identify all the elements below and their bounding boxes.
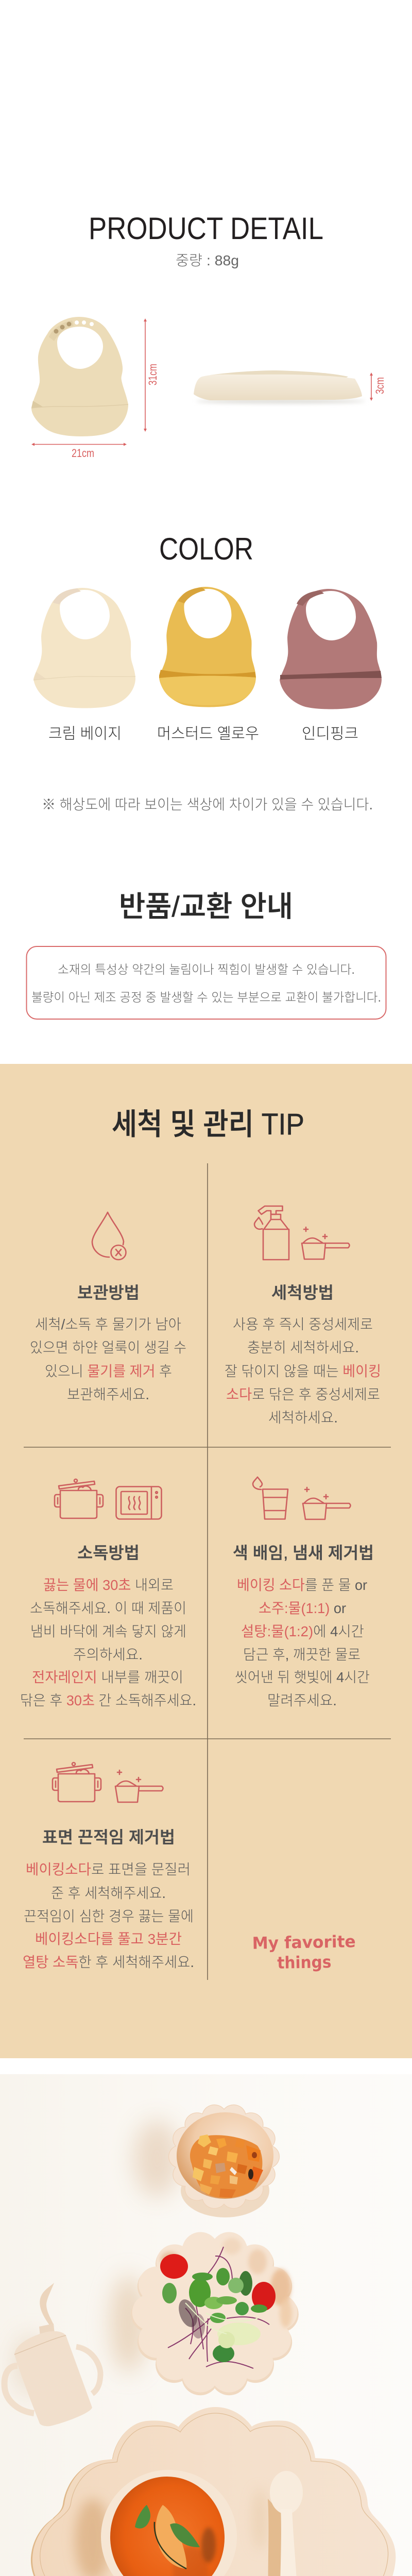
cell: sterilizing method [20, 1479, 196, 1708]
cell: storage method [30, 1212, 186, 1402]
cell: stain and odor removal [233, 1477, 374, 1708]
body text: 충분히 세척하세요. [247, 1340, 359, 1355]
icon: cup and detergent scoop [253, 1477, 350, 1519]
icon: pot and detergent scoop [53, 1762, 163, 1802]
height label: 31cm [146, 364, 159, 385]
cell: washing method [225, 1206, 381, 1426]
body text: 전자레인지 내부를 깨끗이 [32, 1669, 183, 1685]
sippy cup [5, 2283, 100, 2426]
panel: washing and care tips [0, 1064, 412, 2058]
product photo: folded bib side view with thickness [194, 370, 386, 403]
body text: 소다로 닦은 후 중성세제로 [226, 1386, 380, 1402]
icon: water drop with cross [92, 1212, 126, 1260]
body text: 끓는 물에 30초 내외로 [43, 1577, 174, 1593]
notice line 1: 소재의 특성상 약간의 눌림이나 찍힘이 발생할 수 있습니다. [58, 963, 355, 977]
body text [20, 1577, 196, 1708]
pumpkin slice [156, 2505, 186, 2569]
body text: 닦은 후 30초 간 소독해주세요. [20, 1692, 196, 1708]
basil leaves [170, 2523, 200, 2547]
title: product detail: PRODUCT DETAIL [89, 211, 323, 246]
arrow: width [31, 443, 127, 446]
product photo: bib with width and height dimensions [31, 317, 159, 460]
body text: 말려주세요. [267, 1692, 337, 1708]
body text: 주의하세요. [73, 1647, 143, 1663]
body text: 있으니 물기를 제거 후 [45, 1363, 172, 1379]
color swatch: cream beige bib [33, 588, 135, 742]
top scalloped bowl with cereal [134, 2105, 279, 2217]
body text [235, 1577, 370, 1708]
body text: 준 후 세척해주세요. [51, 1885, 166, 1901]
tomato right [252, 2282, 276, 2311]
body text: 베이킹소다로 표면을 문질러 [26, 1861, 191, 1877]
body text: 보관해주세요. [67, 1386, 149, 1402]
shadow [196, 399, 366, 403]
brand mark: my favorite things [252, 1931, 356, 1973]
arrow: thickness [370, 372, 373, 401]
body text: 잘 닦이지 않을 때는 베이킹 [225, 1363, 381, 1379]
heading: returns and exchange: 반품/교환 안내 [119, 890, 293, 923]
heading: care tip: 세척 및 관리 TIP [112, 1108, 304, 1141]
body text: 담근 후, 깨끗한 물로 [243, 1647, 360, 1663]
scalloped placemat [29, 2407, 399, 2576]
callout: returns notice box [27, 946, 386, 1019]
heading: 표면 끈적임 제거법 [42, 1828, 175, 1846]
body text: 씻어낸 뒤 햇빛에 4시간 [235, 1669, 370, 1685]
body text: 사용 후 즉시 중성세제로 [233, 1316, 373, 1332]
folded bib [210, 370, 348, 381]
icon: pot and microwave [55, 1479, 162, 1519]
heading: 색 배임, 냄새 제거법 [233, 1544, 374, 1562]
note: color disclaimer: ※ 해상도에 따라 보이는 색상에 차이가 있을 수 있습니다. [42, 796, 373, 812]
body text: 냄비 바닥에 계속 닿지 않게 [30, 1623, 186, 1639]
arrow: height [144, 318, 147, 432]
bib outline [31, 317, 128, 436]
body text [23, 1861, 194, 1970]
scalloped plate with salad [110, 2232, 299, 2395]
body text: 열탕 소독한 후 세척해주세요. [23, 1954, 194, 1970]
color swatch: indie pink bib [280, 589, 382, 742]
photo: tableware set on white surface [0, 2074, 412, 2576]
body text [30, 1316, 186, 1402]
body text: 끈적임이 심한 경우 끓는 물에 [24, 1908, 194, 1924]
body text: 소독해주세요. 이 때 제품이 [30, 1600, 186, 1616]
heading: 보관방법 [77, 1283, 140, 1302]
body text: 베이킹 소다를 푼 물 or [237, 1577, 367, 1593]
icon: spray bottle and detergent scoop [254, 1206, 349, 1260]
heading: color: COLOR [159, 532, 253, 566]
notice line 2: 불량이 아닌 제조 공정 중 발생할 수 있는 부분으로 교환이 불가합니다. [31, 991, 381, 1005]
spoon [268, 2471, 303, 2576]
body text: 베이킹소다를 풀고 3분간 [35, 1931, 182, 1947]
cell: surface stickiness removal [23, 1762, 194, 1970]
heading: 세척방법 [271, 1283, 334, 1302]
body text [225, 1316, 381, 1426]
width label: 21cm [72, 447, 94, 460]
body text: 설탕:물(1:2)에 4시간 [241, 1623, 364, 1639]
tomato left [160, 2254, 188, 2279]
label: 머스터드 옐로우 [157, 725, 259, 742]
label: 크림 베이지 [48, 725, 122, 742]
heading: 소독방법 [77, 1544, 140, 1562]
brand mark: my favorite things: My favorite [252, 1931, 356, 1953]
thickness label: 3cm [373, 377, 386, 394]
color swatch: mustard yellow bib [157, 587, 259, 742]
brand mark: my favorite things: things [277, 1952, 332, 1973]
body text: 세척하세요. [268, 1410, 338, 1426]
body text: 세척/소독 후 물기가 남아 [35, 1316, 181, 1332]
cereal [190, 2134, 263, 2198]
soup bowl [101, 2470, 237, 2576]
label: 인디핑크 [302, 725, 358, 742]
salad greens [162, 2247, 269, 2368]
body text: 소주:물(1:1) or [259, 1600, 346, 1616]
weight text: 중량 : 88g [176, 252, 239, 268]
body text: 있으면 하얀 얼룩이 생길 수 [30, 1340, 186, 1355]
